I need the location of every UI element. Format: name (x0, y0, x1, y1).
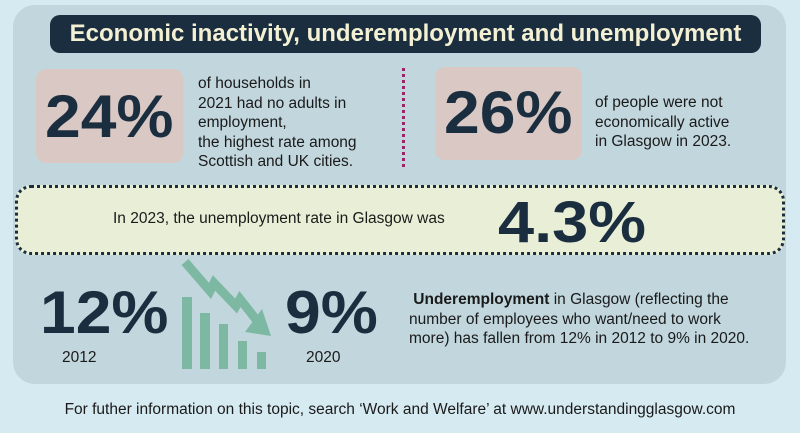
26% description: economically active (595, 114, 729, 130)
24% box (36, 69, 183, 163)
unemployment callout (15, 185, 785, 255)
12% 2012: 2012 (62, 349, 96, 366)
divider dotted magenta (402, 68, 405, 167)
24% description: Scottish and UK cities. (198, 153, 353, 170)
underemployment text: number of employees who want/need to work (409, 310, 721, 328)
26% box (435, 67, 582, 160)
callout text: In 2023, the unemployment rate in Glasgow was (113, 210, 445, 227)
12% 2012: 12% (40, 279, 169, 346)
24% description: employment, (198, 114, 287, 131)
title bar: Economic inactivity, underemployment and unemployment (70, 20, 741, 47)
stat: 24% households (36, 69, 357, 170)
26% figure: 26% (444, 79, 573, 146)
26% description (595, 94, 731, 150)
footer: For futher information on this topic, search ‘Work and Welfare’ at www.understandingglasgow.com (65, 401, 735, 418)
4.3% figure: 4.3% (498, 190, 646, 255)
underemployment text (409, 291, 749, 347)
24% description: 2021 had no adults in (198, 94, 346, 112)
title bar (50, 15, 761, 53)
stat: 26% inactive (435, 67, 731, 160)
9% 2020: 9% (285, 279, 378, 346)
24% figure: 24% (45, 83, 174, 150)
24% description: the highest rate among (198, 134, 357, 150)
underemployment text: more) has fallen from 12% in 2012 to 9% in 2020. (409, 330, 749, 347)
24% description (198, 75, 357, 170)
underemployment text: Underemployment in Glasgow (reflecting the (413, 291, 729, 308)
icon: declining bar chart with arrow (182, 259, 271, 369)
24% description: of households in (198, 75, 311, 92)
9% 2020: 2020 (306, 349, 340, 366)
26% description: of people were not (595, 94, 723, 111)
26% description: in Glasgow in 2023. (595, 133, 731, 150)
